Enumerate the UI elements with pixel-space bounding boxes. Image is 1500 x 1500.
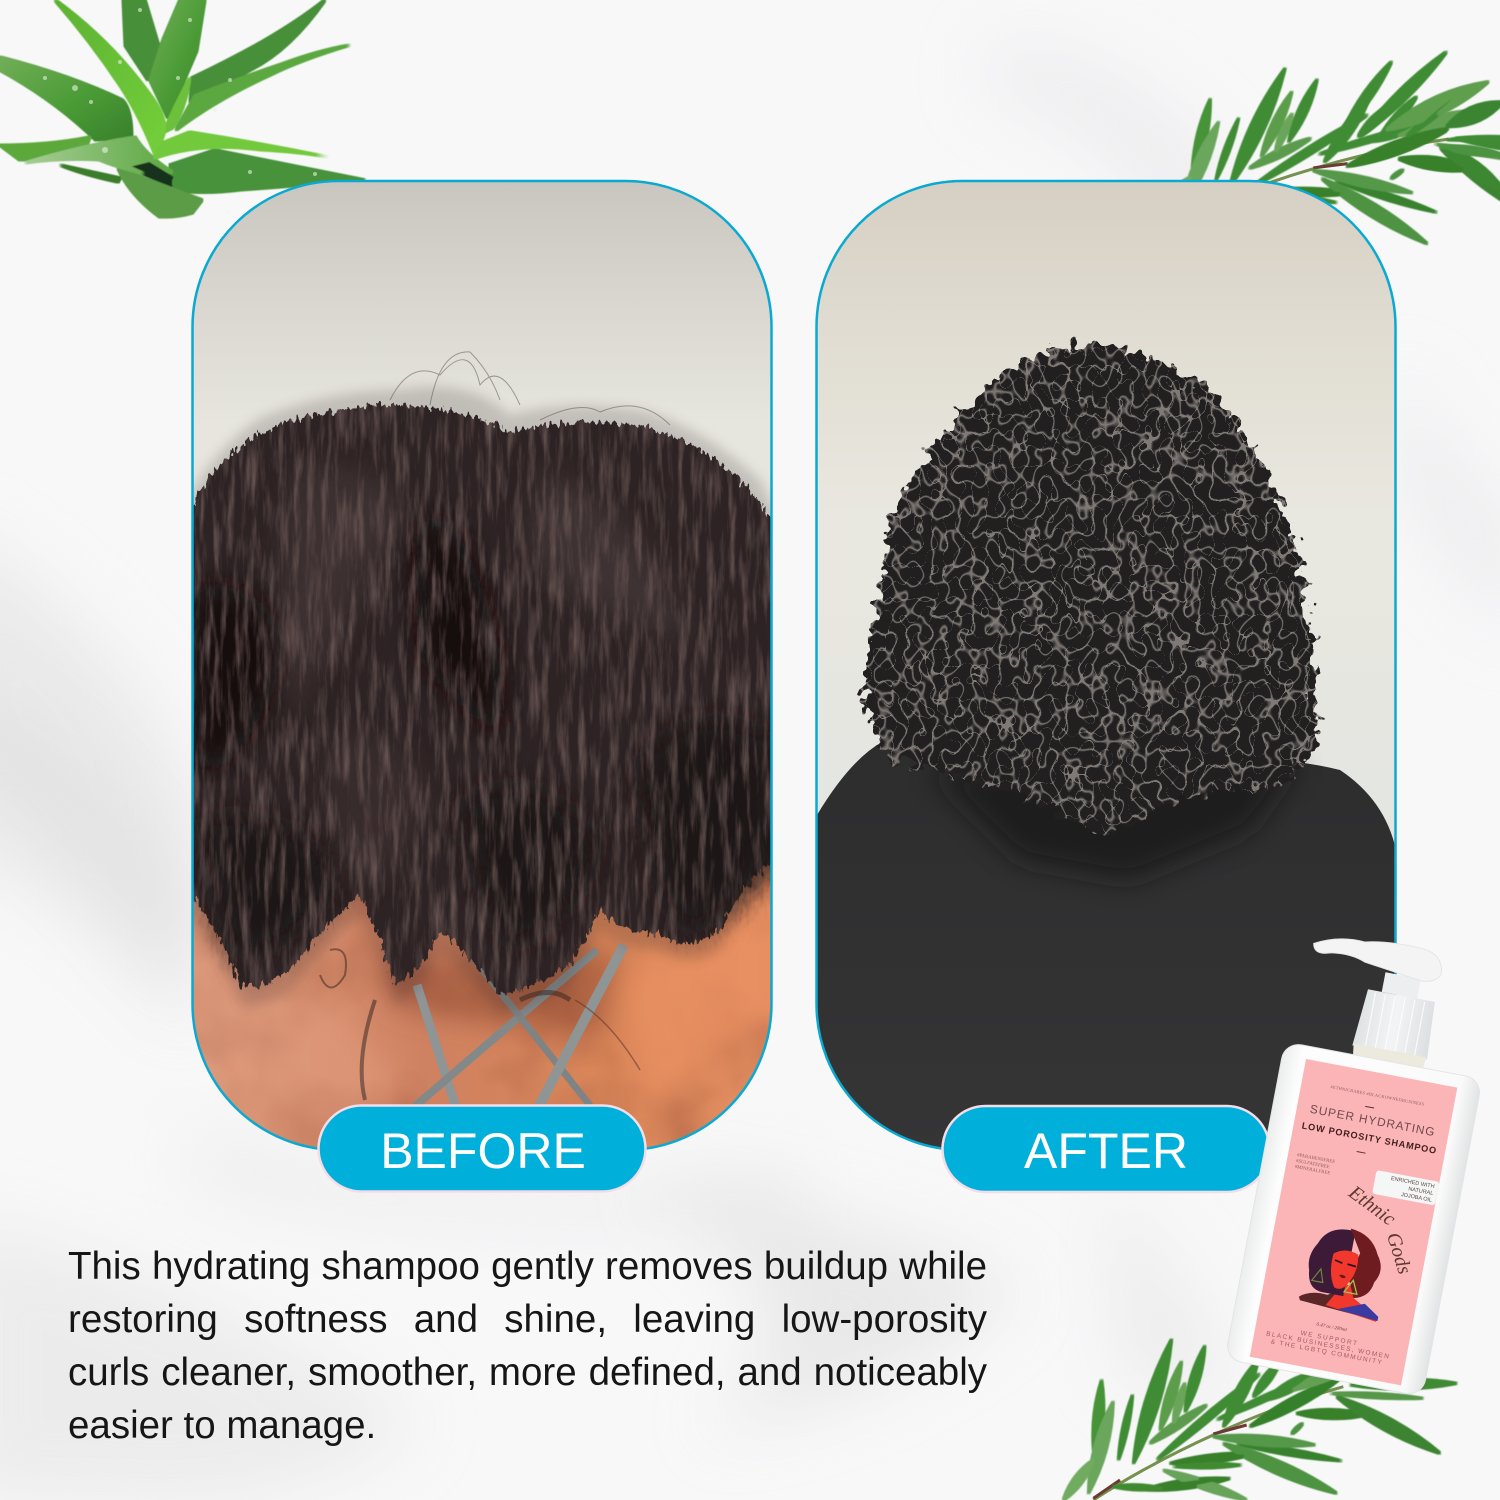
pink label: LOW POROSITY SHAMPOO [1301,1120,1438,1156]
description paragraph [68,1245,987,1447]
pink label: #SULFATEFREE [1295,1159,1330,1170]
hair frizz halo [178,387,785,1015]
pink label [1250,1059,1457,1385]
icon: rosemary sprig top right [1156,52,1500,267]
product: shampoo bottle [1225,926,1500,1396]
panel: before photo [178,181,785,1150]
pink label: & THE LGBTQ COMMUNITY [1270,1338,1384,1367]
pink label: WE SUPPORT [1300,1330,1359,1348]
pink label: ENRICHED WITH [1390,1176,1435,1190]
description paragraph: curls cleaner, smoother, more defined, and noticeably [68,1351,987,1394]
label: before pill [318,1106,646,1192]
before photo content [178,181,785,1150]
black shirt [817,742,1396,1150]
panel: after photo [816,181,1396,1150]
skin [194,864,770,1148]
description paragraph: This hydrating shampoo gently removes buildup while [68,1245,987,1288]
bottle ribbed cap [1350,988,1438,1073]
bottle pump head [1307,928,1445,1002]
description paragraph: easier to manage. [68,1404,376,1447]
illustrated woman [1297,1221,1393,1322]
pink label: #ETHNICBABES #BLACKOWNEDBUSINESS [1330,1084,1425,1107]
pink label: Ethnic [1344,1181,1400,1230]
pink label: #MINERALFREE [1294,1165,1331,1176]
pink label: NATURAL [1408,1186,1434,1197]
icon: aloe vera plant top left [0,0,365,217]
label: before pill: BEFORE [380,1123,586,1179]
pink label: SUPER HYDRATING [1309,1102,1437,1139]
aloe leaves [0,0,365,217]
aloe water droplets [43,8,317,176]
before panel outline [192,181,772,1150]
pink label: BLACK BUSINESSES, WOMEN [1266,1330,1391,1361]
after panel outline [816,181,1396,1150]
bottle body [1225,1042,1482,1396]
description paragraph: restoring softness and shine, leaving low-porosity [68,1298,987,1341]
pink label: #PARABENSFREE [1296,1153,1336,1165]
before hair mass [185,405,780,995]
hair shadow on shirt [930,760,1300,880]
label: after pill: AFTER [1024,1123,1188,1179]
label: after pill [942,1106,1270,1192]
pink label: Gods [1382,1230,1416,1277]
hair wisps [320,352,670,1100]
after photo content [817,181,1396,1150]
bra straps [413,945,624,1108]
icon: rosemary sprig bottom right [1063,1339,1457,1500]
pink label: JOJOBA OIL [1400,1192,1432,1204]
pink label: 0.47 oz / 280ml [1316,1323,1348,1333]
after curly hair mass [864,343,1318,835]
